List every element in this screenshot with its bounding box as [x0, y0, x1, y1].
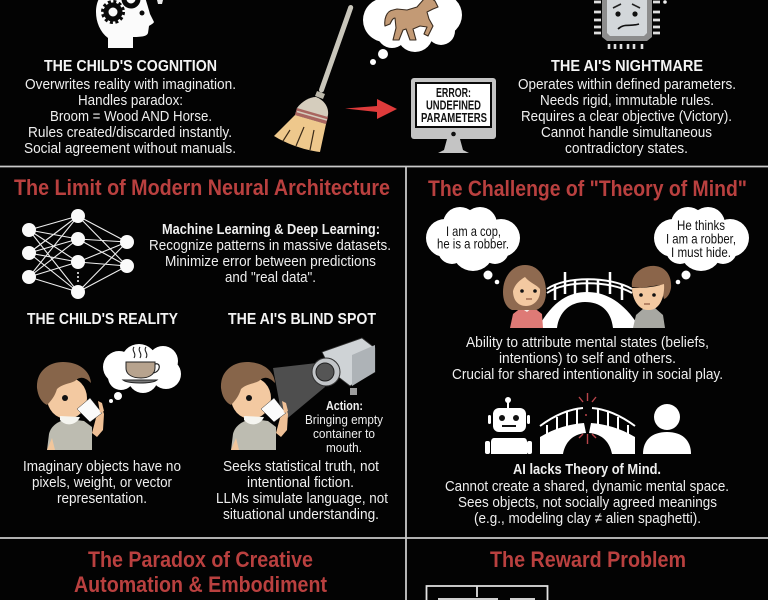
icon: neural network [22, 209, 134, 299]
text block: action caption: mouth. [326, 440, 362, 455]
text block: AI's nightmare list: Operates within defined parameters. [518, 76, 736, 93]
text block: child's cognition list [24, 76, 236, 157]
text block: imaginary objects: pixels, weight, or vector [32, 474, 172, 491]
text block: child's cognition list: Broom = Wood AND Horse. [50, 108, 212, 125]
icon: monitor with error: PARAMETERS [421, 110, 487, 125]
text block: action caption: Action: [326, 398, 363, 413]
text block: action caption [305, 398, 383, 455]
text block: AI lacks theory of mind: AI lacks Theory of Mind. [513, 461, 661, 478]
icon: broom [274, 8, 351, 152]
text block: theory of mind definition: intentions) to self and others. [499, 350, 676, 367]
thought bubble: robber [654, 207, 749, 284]
text block: theory of mind definition: Crucial for shared intentionality in social play. [452, 366, 723, 383]
text block: AI's nightmare list: contradictory states. [565, 140, 688, 157]
text block: theory of mind definition: Ability to attribute mental states (beliefs, [466, 334, 709, 351]
icon: monitor with error: ERROR: [436, 85, 471, 100]
text block: machine learning: Recognize patterns in massive datasets. [149, 237, 391, 254]
panel: the child's cognition [24, 0, 236, 157]
heading: creative automation: Automation & Embodiment [74, 572, 328, 597]
text block: AI's nightmare list [518, 76, 736, 157]
thought bubble: cop [426, 207, 520, 284]
text block: AI's nightmare list: Requires a clear objective (Victory). [521, 108, 732, 125]
text block: machine learning: and "real data". [225, 269, 316, 286]
arrow: broom to error [345, 99, 397, 119]
panel: the AI's nightmare [518, 0, 736, 157]
text block: action caption: Bringing empty [305, 412, 383, 427]
heading: creative automation: The Paradox of Creative [88, 547, 313, 572]
heading: the child's reality: THE CHILD'S REALITY [27, 311, 178, 328]
text block: child's cognition list: Handles paradox: [78, 92, 183, 109]
text block: statistical truth: Seeks statistical truth, not [223, 458, 380, 475]
text block: imaginary objects [23, 458, 181, 507]
heading: neural architecture: The Limit of Modern Neural Architecture [14, 175, 390, 200]
icon: head with gears [96, 0, 163, 48]
icon: robot [485, 397, 532, 454]
thought bubble: robber: I am a robber, [666, 230, 736, 246]
text block: child's cognition list: Rules created/discarded instantly. [28, 124, 232, 141]
panel: the challenge of theory of mind [426, 176, 749, 527]
icon: monitor with error [411, 78, 496, 153]
heading: creative automation [74, 547, 328, 597]
icon: imagined horse in thought cloud [363, 0, 462, 65]
text block: child's cognition list: Overwrites reality with imagination. [25, 76, 236, 93]
thought bubble: robber: I must hide. [671, 244, 731, 260]
text block: child's cognition list: Social agreement without manuals. [24, 140, 236, 157]
text block: machine learning [149, 221, 391, 286]
icon: bridge between two children [503, 265, 671, 328]
panel: the limit of modern neural architecture [14, 175, 391, 523]
text block: imaginary objects: representation. [57, 490, 147, 507]
text block: AI lacks theory of mind [445, 461, 729, 527]
text block: action caption: container to [313, 426, 375, 441]
icon: person [643, 404, 691, 454]
text block: imaginary objects: Imaginary objects have no [23, 458, 181, 475]
text block: machine learning: Minimize error between predictions [165, 253, 376, 270]
heading: the AI's nightmare: THE AI'S NIGHTMARE [551, 58, 703, 75]
icon: child imagining tea [37, 344, 181, 450]
thought bubble: cop: I am a cop, [446, 223, 501, 239]
text block: statistical truth: situational understanding. [223, 506, 379, 523]
text block: AI's nightmare list: Cannot handle simultaneous [541, 124, 712, 141]
text block: machine learning: Machine Learning & Deep Learning: [162, 221, 380, 238]
icon: reward diagram [426, 586, 548, 600]
panel: the paradox of creative automation and embodiment [74, 547, 328, 597]
icon: camera watching child [221, 338, 375, 450]
icon: broken bridge [540, 393, 635, 454]
text block: AI lacks theory of mind: (e.g., modeling clay ≠ alien spaghetti). [474, 510, 701, 527]
text block: AI lacks theory of mind: Cannot create a shared, dynamic mental space. [445, 478, 729, 495]
thought bubble: robber: He thinks [677, 217, 725, 233]
heading: reward problem: The Reward Problem [490, 547, 686, 572]
text block: statistical truth: intentional fiction. [247, 474, 354, 491]
icon: monitor with error: UNDEFINED [426, 98, 481, 112]
text block: AI's nightmare list: Needs rigid, immutable rules. [540, 92, 714, 109]
thought bubble: cop: he is a robber. [437, 236, 509, 252]
heading: the child's cognition: THE CHILD'S COGNITION [44, 58, 217, 75]
text block: statistical truth [216, 458, 389, 523]
text block: AI lacks theory of mind: Sees objects, not socially agreed meanings [458, 494, 717, 511]
text block: statistical truth: LLMs simulate language, not [216, 490, 389, 507]
text block: theory of mind definition [452, 334, 723, 383]
heading: the AI's blind spot: THE AI'S BLIND SPOT [228, 311, 376, 328]
icon: sad microchip [594, 0, 667, 49]
panel: the reward problem [426, 547, 686, 600]
